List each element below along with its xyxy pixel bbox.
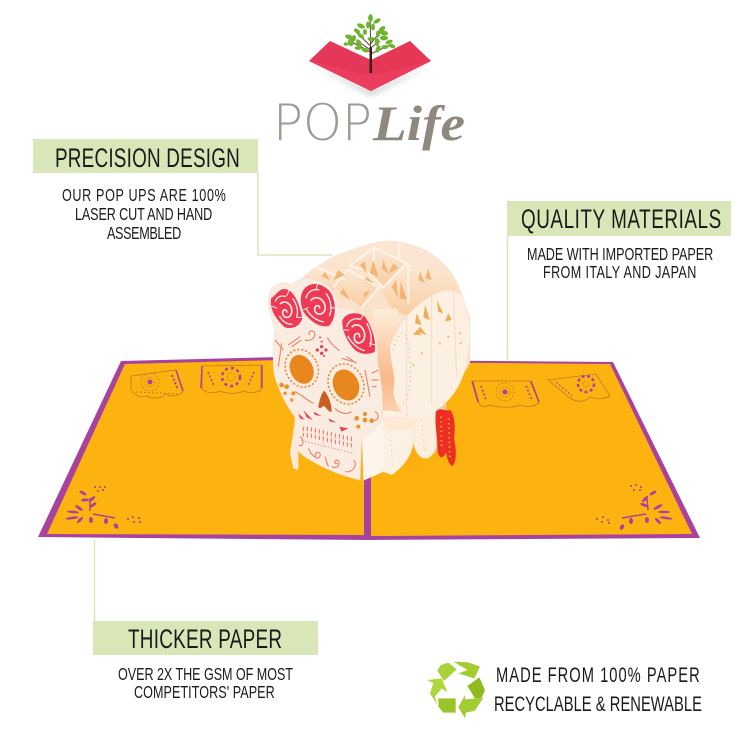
dome cell: top center xyxy=(349,247,407,287)
floral corner: bottom right xyxy=(596,484,673,531)
heading band xyxy=(33,139,258,173)
recycling badge xyxy=(427,662,702,718)
icon: recycling symbol xyxy=(427,662,485,718)
heading: PRECISION DESIGN xyxy=(55,143,240,173)
rose middle xyxy=(301,282,336,326)
skull shadow on card xyxy=(260,395,490,495)
logo: Pop Life xyxy=(273,14,465,152)
rear skull dotted edge xyxy=(393,333,410,407)
red accents xyxy=(298,336,348,432)
rib tongue 3 xyxy=(413,403,436,458)
rib dotted lines xyxy=(390,420,425,470)
papel picado: right inner banner xyxy=(472,381,539,407)
rear skull cut-outs xyxy=(412,300,462,366)
teeth xyxy=(302,427,354,453)
description xyxy=(62,186,226,244)
connector: precision design xyxy=(258,173,332,255)
card left orange leaf xyxy=(47,360,364,535)
dome cut-out pattern xyxy=(322,260,432,300)
peach back panel xyxy=(427,403,447,458)
rib tongue 1 xyxy=(362,417,383,481)
heading band xyxy=(507,201,731,236)
panel: thicker paper callout xyxy=(93,621,318,703)
card right orange leaf xyxy=(371,362,692,536)
forehead and cheek decoration xyxy=(275,331,378,420)
description: COMPETITORS' PAPER xyxy=(134,683,275,703)
eye right xyxy=(328,365,364,405)
description: OUR POP UPS ARE 100% xyxy=(62,186,226,206)
connector: thicker paper xyxy=(94,540,96,622)
dome cell: right xyxy=(382,265,461,315)
rear skull fold lines xyxy=(407,290,457,417)
card center spine xyxy=(364,478,371,540)
description: LASER CUT AND HAND xyxy=(75,205,212,225)
description: ASSEMBLED xyxy=(107,224,181,244)
papel picado: left inner banner xyxy=(201,365,262,393)
description: FROM ITALY AND JAPAN xyxy=(543,263,696,283)
card purple backing xyxy=(38,357,700,540)
left tab xyxy=(290,420,298,470)
logo wordmark POP: POP xyxy=(273,94,372,152)
cheek orange petals xyxy=(279,383,374,429)
recycling text: MADE FROM 100% PAPER xyxy=(496,663,700,687)
pop-up card xyxy=(38,357,700,540)
rose left xyxy=(271,289,302,328)
logo shadow xyxy=(313,66,431,96)
eye dotted rings xyxy=(279,344,370,410)
nose xyxy=(318,391,332,412)
connector: quality materials xyxy=(506,235,508,360)
rose right xyxy=(342,313,375,354)
heading: QUALITY MATERIALS xyxy=(521,204,721,234)
description: MADE WITH IMPORTED PAPER xyxy=(527,245,713,265)
description xyxy=(527,245,713,283)
rib tongue 2 xyxy=(383,410,413,475)
panel: precision design callout xyxy=(33,139,258,244)
logo wordmark Life: Life xyxy=(372,95,465,151)
recycling text xyxy=(494,663,702,716)
heading band xyxy=(93,621,318,655)
floral corner: bottom left xyxy=(65,486,141,530)
description xyxy=(118,665,293,703)
panel: quality materials callout xyxy=(507,201,731,283)
sugar skull pop-up xyxy=(268,241,470,481)
icon: tree xyxy=(344,14,396,73)
eye left xyxy=(285,351,318,388)
red paper flower at back xyxy=(435,409,456,466)
dome cell: far left xyxy=(295,267,345,302)
front skull face xyxy=(268,279,382,480)
papel picado: left outer banner xyxy=(131,370,183,398)
recycling text: RECYCLABLE & RENEWABLE xyxy=(494,692,702,716)
icon: red open book xyxy=(309,41,431,91)
heading: THICKER PAPER xyxy=(128,624,282,654)
description: OVER 2X THE GSM OF MOST xyxy=(118,665,293,685)
skull back dome xyxy=(293,241,470,397)
rear side skull layer xyxy=(390,290,469,419)
dome cell: left xyxy=(333,269,379,307)
gap between front and rear layers xyxy=(373,308,410,437)
dome ribs xyxy=(317,243,408,307)
chin swirls xyxy=(298,437,355,472)
papel picado: right outer banner xyxy=(548,374,610,401)
rib tongue 2 shade xyxy=(383,417,413,430)
